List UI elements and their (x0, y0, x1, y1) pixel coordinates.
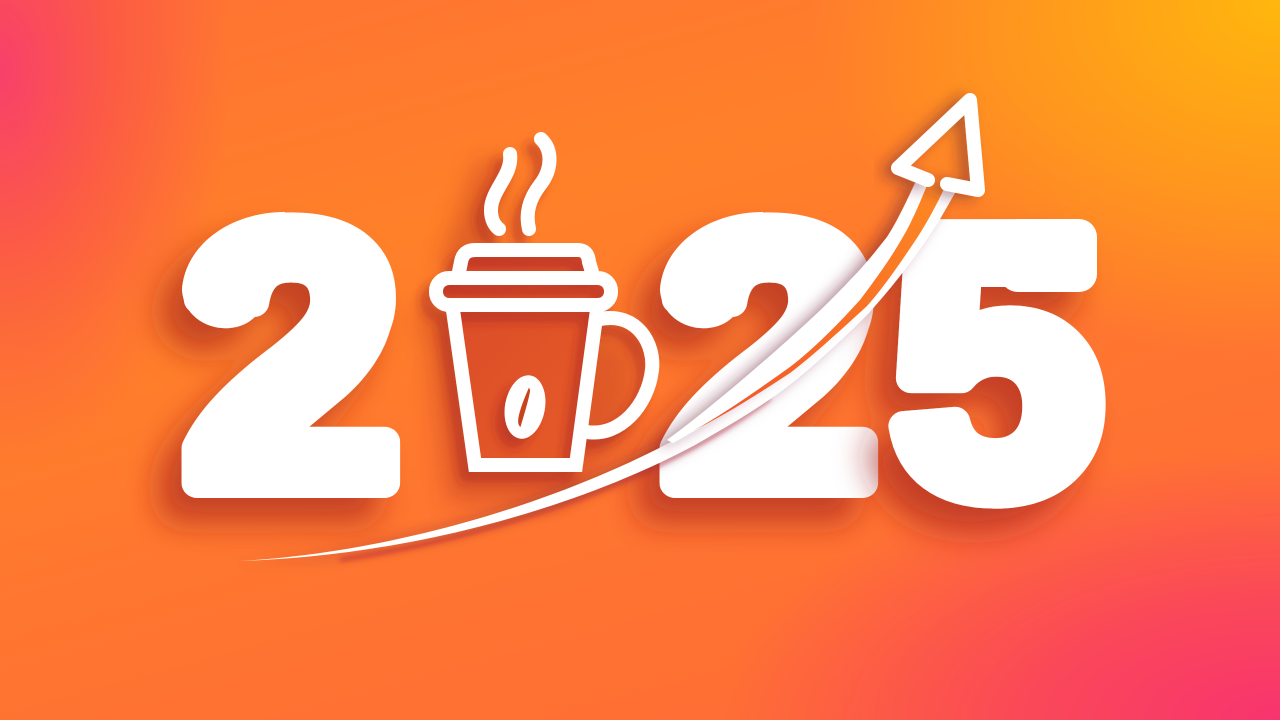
digit 5: 5 (892, 155, 1101, 570)
coffee bean (500, 372, 550, 442)
digit 2 left: 2 (184, 152, 400, 561)
cup interior shading (436, 256, 611, 465)
digit 2 right: 2 (662, 152, 878, 561)
arrow tail and right edge (240, 180, 955, 561)
icon: coffee cup (413, 139, 652, 502)
arrow head (898, 100, 978, 190)
steam left (491, 154, 510, 229)
arrow left edge (667, 178, 930, 443)
steam right (528, 139, 550, 229)
arrow shaft gap (690, 178, 948, 432)
handle (587, 318, 652, 433)
lid top (459, 250, 592, 272)
cup cast shadow (413, 162, 638, 502)
arrow underside shadow (340, 398, 770, 560)
arrow: rising growth curve (240, 100, 978, 561)
cup body (453, 310, 597, 465)
lid rim (436, 278, 611, 305)
